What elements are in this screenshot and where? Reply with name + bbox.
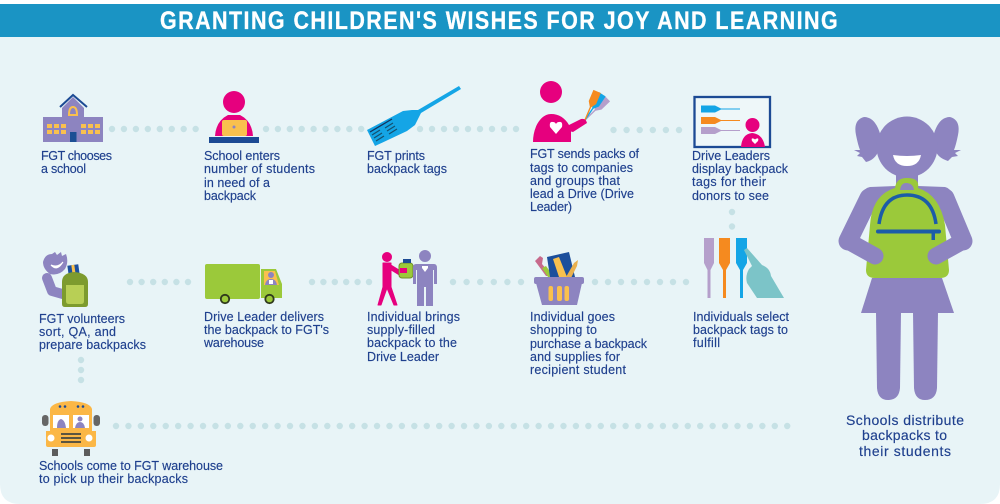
text: step 9 [203,310,329,350]
step: Individual brings backpack [367,250,460,364]
text: step 6: fulfill [693,336,720,350]
text: step 4: Leader) [530,200,572,214]
step: Schools come to warehouse [39,401,223,486]
text: step 6: Individuals select [693,310,790,324]
step: Individual goes shopping [530,252,648,377]
icon: school bus [42,401,100,456]
text: step 2: School enters [204,149,280,163]
text: step 10: prepare backpacks [39,338,146,352]
icon: person holding tags [533,81,610,142]
text: step 11: Schools come to FGT warehouse [39,459,223,473]
text: step 9: warehouse [203,336,264,350]
text: step 8: supply-filled [367,323,435,337]
dotted connectors [81,129,788,426]
step: Drive Leader delivers backpack [203,264,329,350]
step: FGT volunteers prepare [39,252,146,352]
text: final step: Schools distribute [846,412,964,428]
icon: school [43,95,103,142]
icon: delivery truck [205,264,282,303]
step: school enters number [204,91,315,203]
text: step 3: FGT prints [367,149,425,163]
step: FGT sends packs of tags [530,81,640,214]
text: step 7: shopping to [530,323,597,337]
text: step 9: the backpack to FGT's [204,323,329,337]
icon: backpack tag [367,86,461,146]
text: step 2: number of students [204,162,315,176]
icon: girl with backpack [848,116,963,400]
text: step 4: tags to companies [530,161,633,175]
text: step 2 [204,149,315,203]
icon: shopping basket [534,252,584,305]
icon: two people exchanging backpack [378,250,437,306]
icon: tags and hand [704,238,784,298]
text: step 7: purchase a backpack [530,337,648,351]
text: step 5 [692,149,789,203]
text: step 4 [530,147,640,214]
title banner [0,4,1000,37]
text: step 8: Drive Leader [367,350,439,364]
text: step 3 [367,149,447,176]
text: step 4: and groups that [530,174,621,188]
text: step 8 [367,310,460,364]
text: step 8: backpack to the [367,336,457,350]
text: step 2: in need of a [204,176,270,190]
text: step 4: lead a Drive (Drive [530,187,634,201]
text: step 8: Individual brings [367,310,460,324]
text: step 7: and supplies for [530,350,620,364]
text: step 7: recipient student [530,363,627,377]
text: final step: backpacks to [862,427,947,443]
text: step 10 [39,312,146,352]
text: step 5: donors to see [692,189,769,203]
step: FGT chooses a school [41,95,112,176]
text: step 1: FGT chooses [41,149,112,163]
text: step 5: display backpack [692,162,789,176]
text: step 7: Individual goes [530,310,615,324]
text: final step [846,412,964,459]
step: FGT prints backpack tags [367,86,461,176]
text: step 6 [693,310,790,350]
text: step 6: backpack tags to [693,323,788,337]
text: step 5: Drive Leaders [692,149,770,163]
title banner: GRANTING CHILDREN'S WISHES FOR JOY AND LEARNING [160,6,838,34]
step: Individuals select tags [693,238,790,350]
icon: volunteer with backpack [43,252,88,307]
text: step 11 [39,459,223,486]
text: step 1 [41,149,112,176]
icon: person at laptop [209,91,259,143]
text: step 7 [530,310,648,377]
step: Drive Leaders display tags [692,97,789,203]
text: step 5: tags for their [692,175,766,189]
text: final step: their students [859,443,951,459]
text: step 10: FGT volunteers [39,312,125,326]
text: step 1: a school [41,162,86,176]
text: step 2: backpack [204,189,257,203]
step: Schools distribute backpacks [846,116,964,459]
text: step 3: backpack tags [367,162,447,176]
text: step 11: to pick up their backpacks [39,472,188,486]
text: step 10: sort, QA, and [39,325,116,339]
text: step 4: FGT sends packs of [530,147,640,161]
text: step 9: Drive Leader delivers [204,310,324,324]
icon: display board [694,97,770,147]
